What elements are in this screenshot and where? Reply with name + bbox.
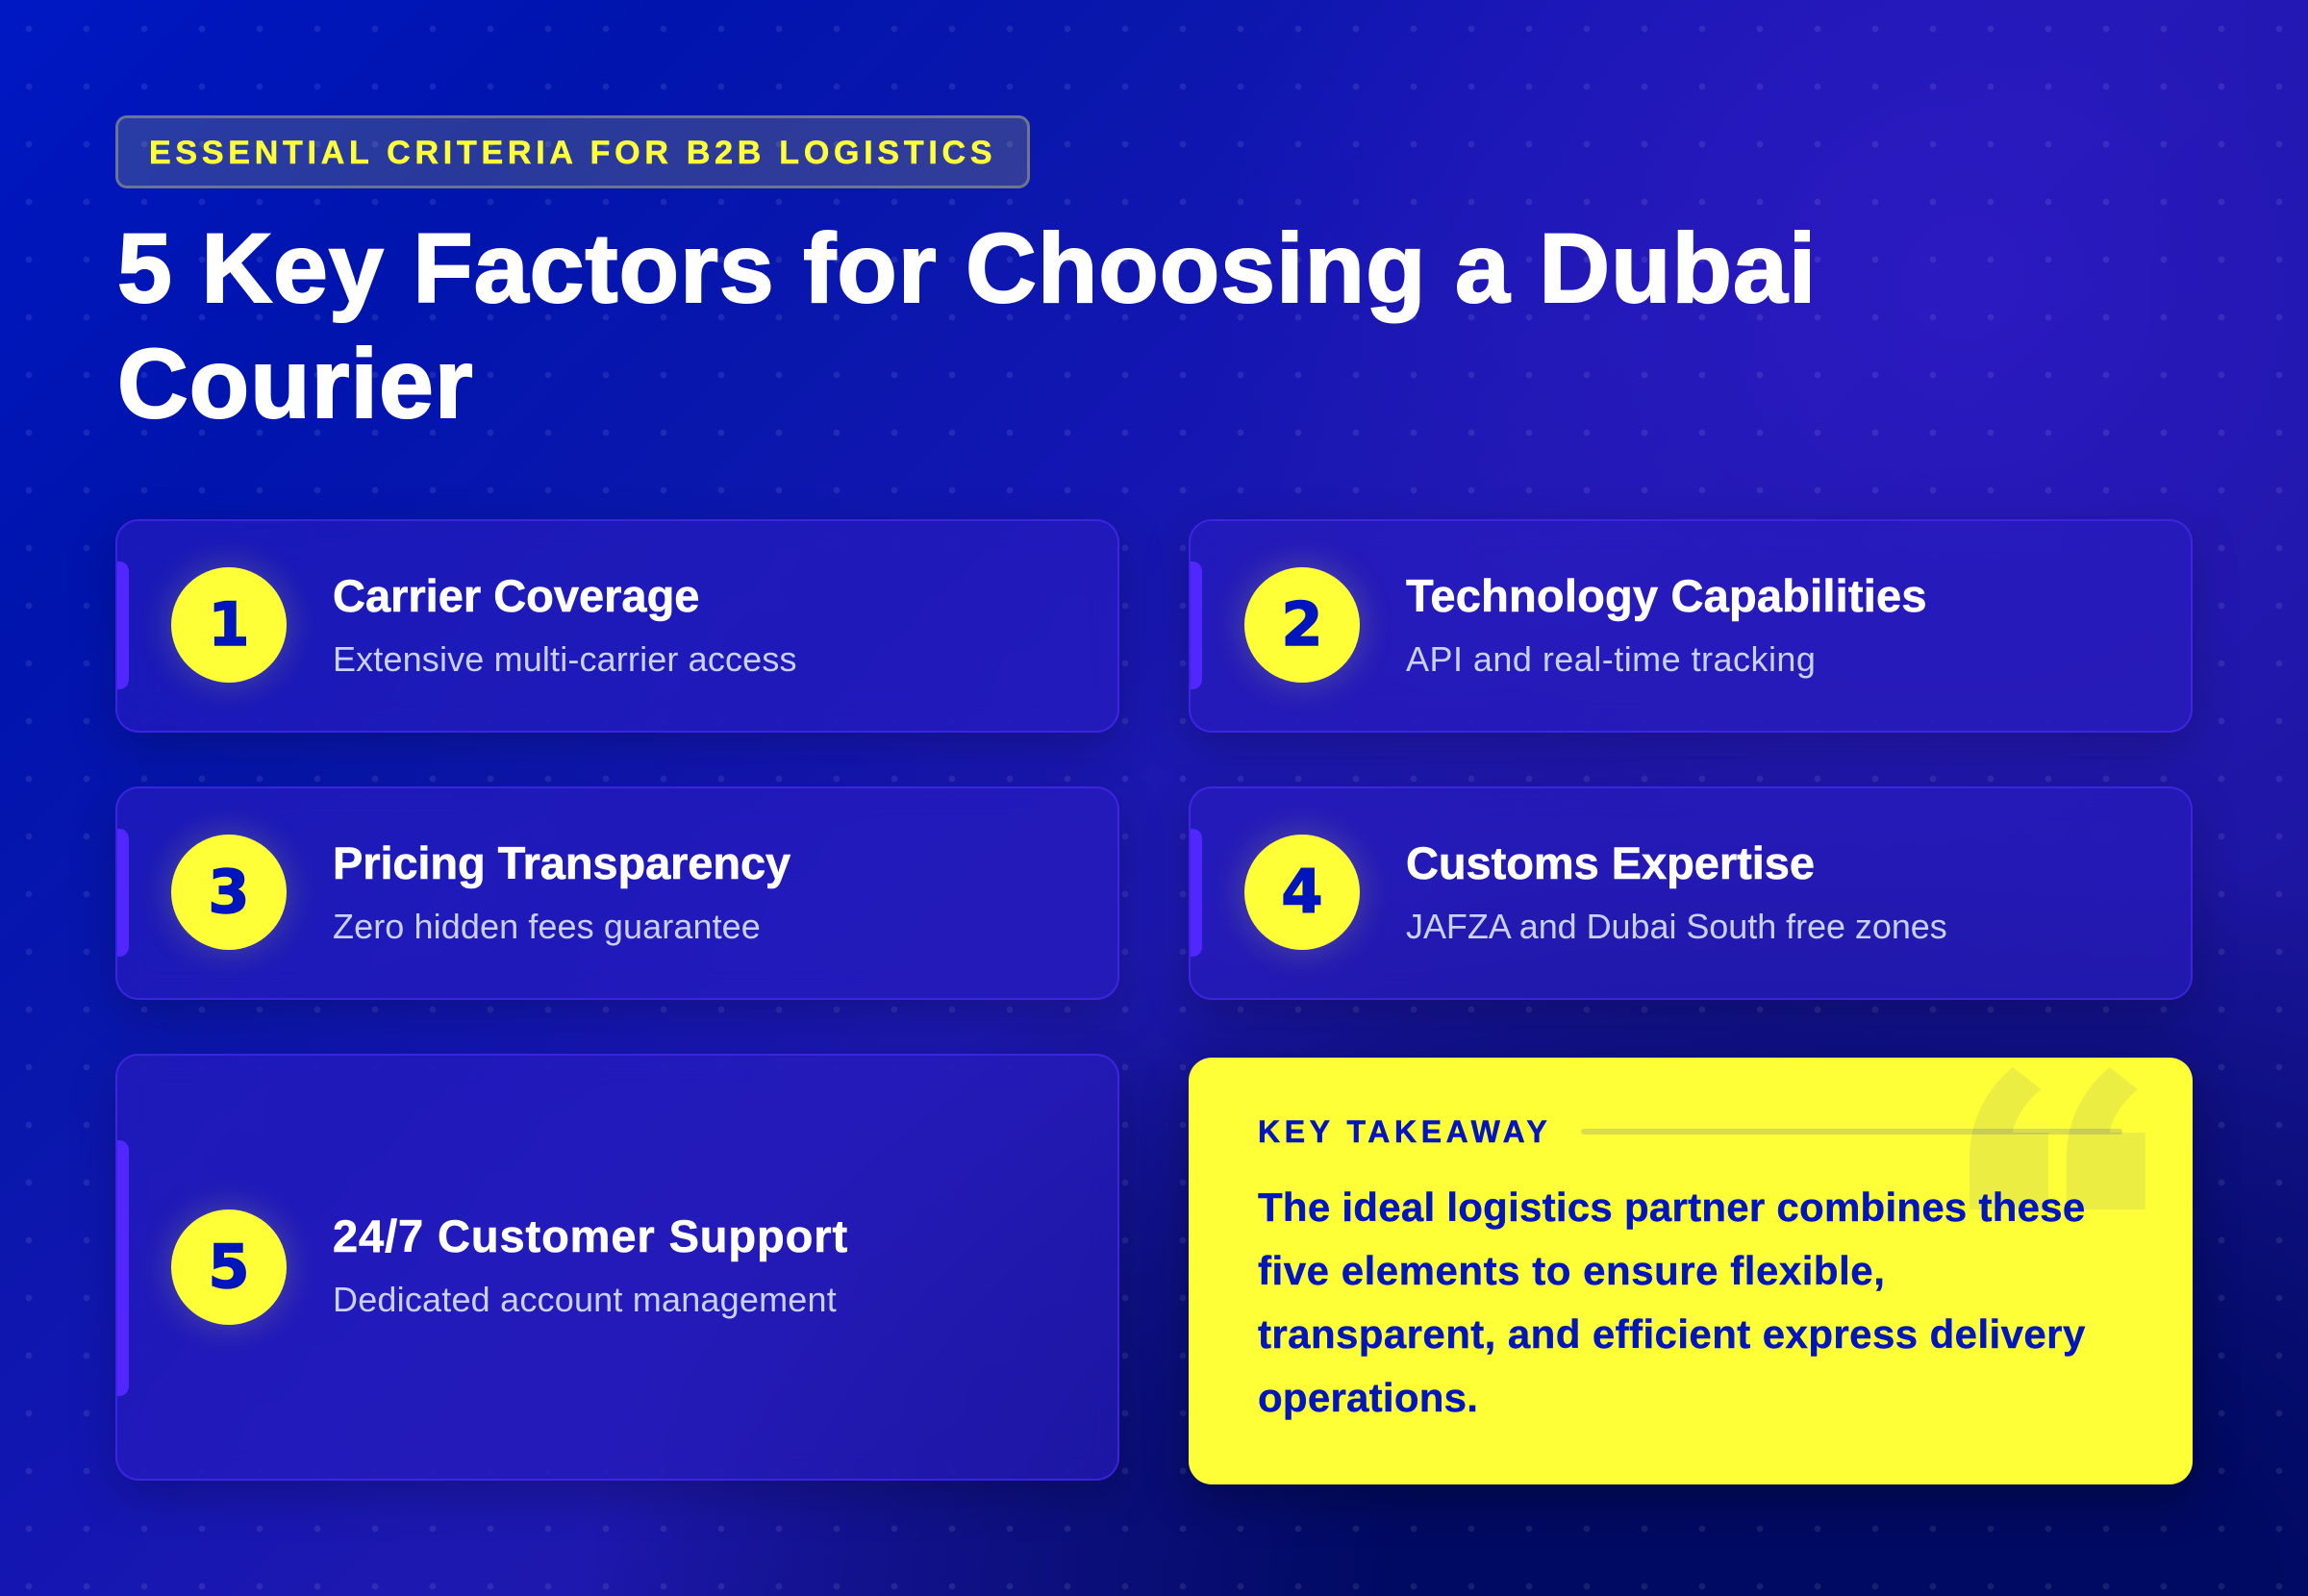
heading: pricing transparency: Pricing Transparency <box>333 837 790 888</box>
accent bar 5 <box>117 1140 129 1396</box>
number badge 3 <box>171 835 287 950</box>
takeaway text <box>1258 1185 2086 1420</box>
accent bar 2 <box>1191 561 1202 689</box>
description: technology capabilities: API and real-time tracking <box>1406 639 1816 679</box>
title: 5 Key Factors for Choosing a Dubai <box>117 213 1817 323</box>
description: carrier coverage: Extensive multi-carrier access <box>333 639 797 679</box>
description: pricing transparency: Zero hidden fees guarantee <box>333 907 761 946</box>
icon: quotation mark <box>1969 1067 2145 1209</box>
description: customer support: Dedicated account management <box>333 1280 837 1319</box>
takeaway label: KEY TAKEAWAY <box>1258 1114 1551 1149</box>
number badge 4: 4 <box>1281 857 1323 927</box>
takeaway text: five elements to ensure flexible, <box>1258 1248 1885 1293</box>
heading: customs expertise: Customs Expertise <box>1406 837 1815 888</box>
heading: technology capabilities: Technology Capabilities <box>1406 570 1927 621</box>
heading: customer support: 24/7 Customer Support <box>333 1210 848 1261</box>
panel: factor 5 <box>115 1054 1119 1481</box>
takeaway text: operations. <box>1258 1375 1478 1420</box>
number badge 5 <box>171 1209 287 1325</box>
panel: factor 2 <box>1189 519 2193 733</box>
panel: factor 3 <box>115 786 1119 1000</box>
panel: factor 4 <box>1189 786 2193 1000</box>
number badge 2 <box>1244 567 1360 683</box>
title <box>117 213 1817 438</box>
number badge 1 <box>171 567 287 683</box>
number badge 2: 2 <box>1281 589 1323 660</box>
number badge 1: 1 <box>208 589 250 660</box>
panel: key takeaway <box>1189 1058 2193 1484</box>
title: Courier <box>117 329 474 438</box>
badge <box>115 115 1030 188</box>
badge: ESSENTIAL CRITERIA FOR B2B LOGISTICS <box>149 135 996 171</box>
panel: factor 1 <box>115 519 1119 733</box>
description: customs expertise: JAFZA and Dubai South free zones <box>1406 907 1947 946</box>
heading: carrier coverage: Carrier Coverage <box>333 570 699 621</box>
number badge 4 <box>1244 835 1360 950</box>
takeaway text: transparent, and efficient express delivery <box>1258 1311 2086 1357</box>
number badge 5: 5 <box>208 1232 250 1302</box>
takeaway text: The ideal logistics partner combines these <box>1258 1185 2085 1230</box>
number badge 3: 3 <box>208 857 250 927</box>
accent bar 4 <box>1191 829 1202 957</box>
accent bar 1 <box>117 561 129 689</box>
accent bar 3 <box>117 829 129 957</box>
